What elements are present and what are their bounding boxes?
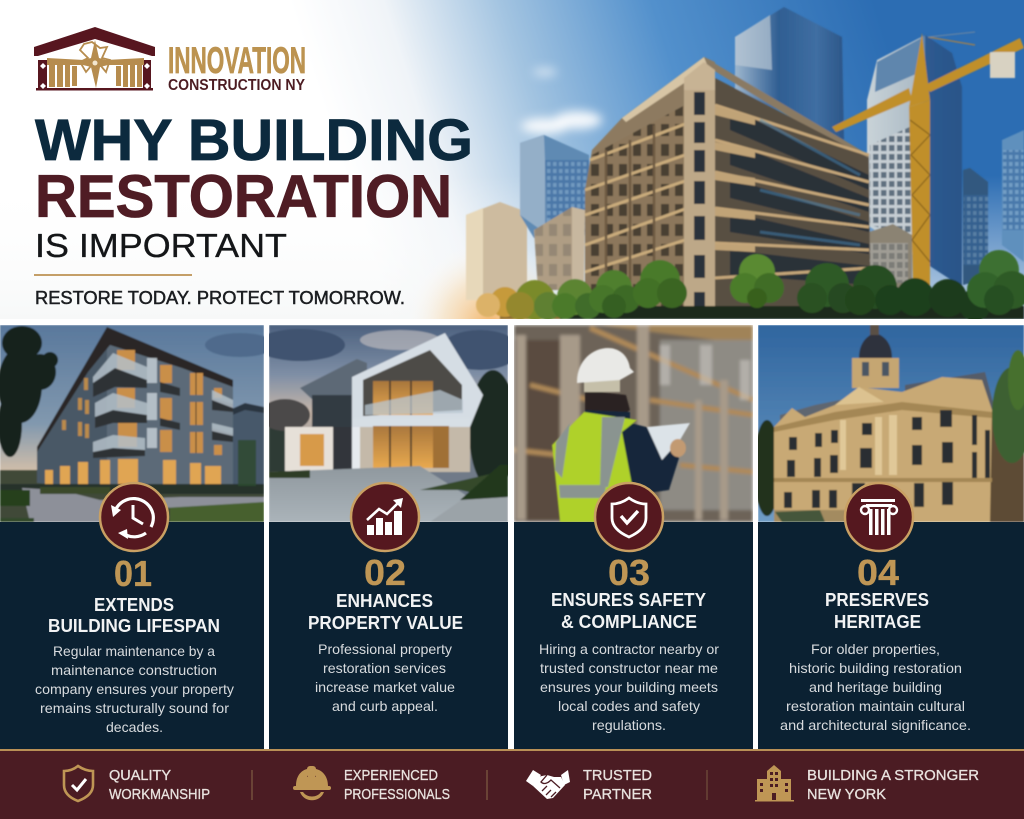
description: trusted constructor near me bbox=[540, 661, 718, 676]
photo: apartment building at dusk bbox=[0, 325, 275, 522]
footer item: trusted partner bbox=[526, 768, 652, 803]
description bbox=[539, 642, 719, 733]
panel: preserves heritage bbox=[754, 325, 1024, 749]
description: Professional property bbox=[318, 642, 452, 657]
description: regulations. bbox=[592, 718, 666, 733]
heading: ENSURES SAFETY bbox=[551, 589, 707, 610]
description: Hiring a contractor nearby or bbox=[539, 642, 719, 657]
footer item: experienced professionals bbox=[293, 766, 450, 803]
icon: gold buildings bbox=[755, 765, 794, 802]
description: remains structurally sound for bbox=[40, 701, 229, 716]
heading bbox=[48, 594, 220, 636]
description bbox=[315, 642, 455, 714]
title bbox=[35, 108, 473, 264]
footer item: building a stronger new york bbox=[755, 765, 979, 803]
icon: gold hard hat bbox=[293, 766, 331, 800]
logo mark: maroon temple pediment with gold columns and compass star bbox=[34, 27, 155, 90]
icon: gold shield bbox=[64, 766, 93, 801]
footer item: quality workmanship: WORKMANSHIP bbox=[109, 787, 210, 803]
heading: PRESERVES bbox=[825, 589, 929, 610]
card body bbox=[269, 522, 508, 749]
description: increase market value bbox=[315, 680, 455, 695]
footer item: experienced professionals: EXPERIENCED bbox=[344, 768, 438, 784]
brand name: CONSTRUCTION NY bbox=[168, 77, 306, 94]
footer item: building a stronger new york: BUILDING A STRONGER bbox=[807, 768, 979, 784]
description: and curb appeal. bbox=[332, 699, 438, 714]
footer item: building a stronger new york: NEW YORK bbox=[807, 787, 886, 803]
icon: clock with circular arrows bbox=[100, 483, 168, 551]
tagline: RESTORE TODAY. PROTECT TOMORROW. bbox=[35, 287, 405, 308]
brand name: INNOVATION bbox=[168, 40, 306, 81]
description: decades. bbox=[106, 720, 163, 735]
description: maintenance construction bbox=[51, 663, 217, 678]
gold rule bbox=[34, 274, 192, 276]
description: historic building restoration bbox=[789, 661, 962, 676]
card body bbox=[0, 522, 264, 749]
photo: historic stone building bbox=[754, 325, 1024, 522]
panel: ensures safety and compliance bbox=[514, 325, 753, 749]
description: and heritage building bbox=[809, 680, 942, 695]
panel: extends building lifespan bbox=[0, 325, 275, 749]
description: For older properties, bbox=[811, 642, 940, 657]
photo: inspector in hi-vis vest with clipboard bbox=[514, 325, 753, 522]
footer item: quality workmanship bbox=[64, 766, 210, 803]
heading: ENHANCES bbox=[336, 590, 433, 611]
photo: modern house at dusk bbox=[255, 325, 520, 522]
description: company ensures your property bbox=[35, 682, 234, 697]
icon: classical column bbox=[845, 483, 913, 551]
description: Regular maintenance by a bbox=[53, 644, 215, 659]
description: ensures your building meets bbox=[540, 680, 718, 695]
description: restoration maintain cultural bbox=[786, 699, 965, 714]
description bbox=[35, 644, 234, 735]
brand name bbox=[168, 40, 306, 94]
card body bbox=[758, 522, 1024, 749]
number 02: 02 bbox=[364, 552, 406, 593]
description: local codes and safety bbox=[558, 699, 700, 714]
footer band bbox=[0, 749, 1024, 819]
footer item: quality workmanship: QUALITY bbox=[109, 768, 171, 784]
title: IS IMPORTANT bbox=[35, 227, 287, 264]
title: RESTORATION bbox=[35, 163, 452, 230]
number 04: 04 bbox=[857, 552, 899, 593]
footer item: experienced professionals: PROFESSIONALS bbox=[344, 787, 450, 803]
footer item: trusted partner: PARTNER bbox=[583, 787, 652, 803]
heading bbox=[308, 590, 463, 633]
heading bbox=[825, 589, 929, 632]
heading: EXTENDS bbox=[94, 594, 174, 615]
panel: enhances property value bbox=[255, 325, 520, 749]
hero photo: city skyline with scaffolded building and crane bbox=[0, 0, 1024, 321]
heading: HERITAGE bbox=[834, 611, 921, 632]
icon: shield with check bbox=[595, 483, 663, 551]
heading bbox=[551, 589, 707, 632]
heading: PROPERTY VALUE bbox=[308, 612, 463, 633]
icon: rising bar chart bbox=[351, 483, 419, 551]
heading: & COMPLIANCE bbox=[561, 611, 697, 632]
title: WHY BUILDING bbox=[35, 108, 473, 173]
description: and architectural significance. bbox=[780, 718, 971, 733]
number 01: 01 bbox=[114, 553, 152, 594]
number 03: 03 bbox=[608, 552, 650, 593]
description: restoration services bbox=[323, 661, 446, 676]
description bbox=[780, 642, 971, 733]
heading: BUILDING LIFESPAN bbox=[48, 615, 220, 636]
card body bbox=[514, 522, 753, 749]
footer item: trusted partner: TRUSTED bbox=[583, 768, 652, 784]
icon: handshake bbox=[526, 770, 570, 799]
